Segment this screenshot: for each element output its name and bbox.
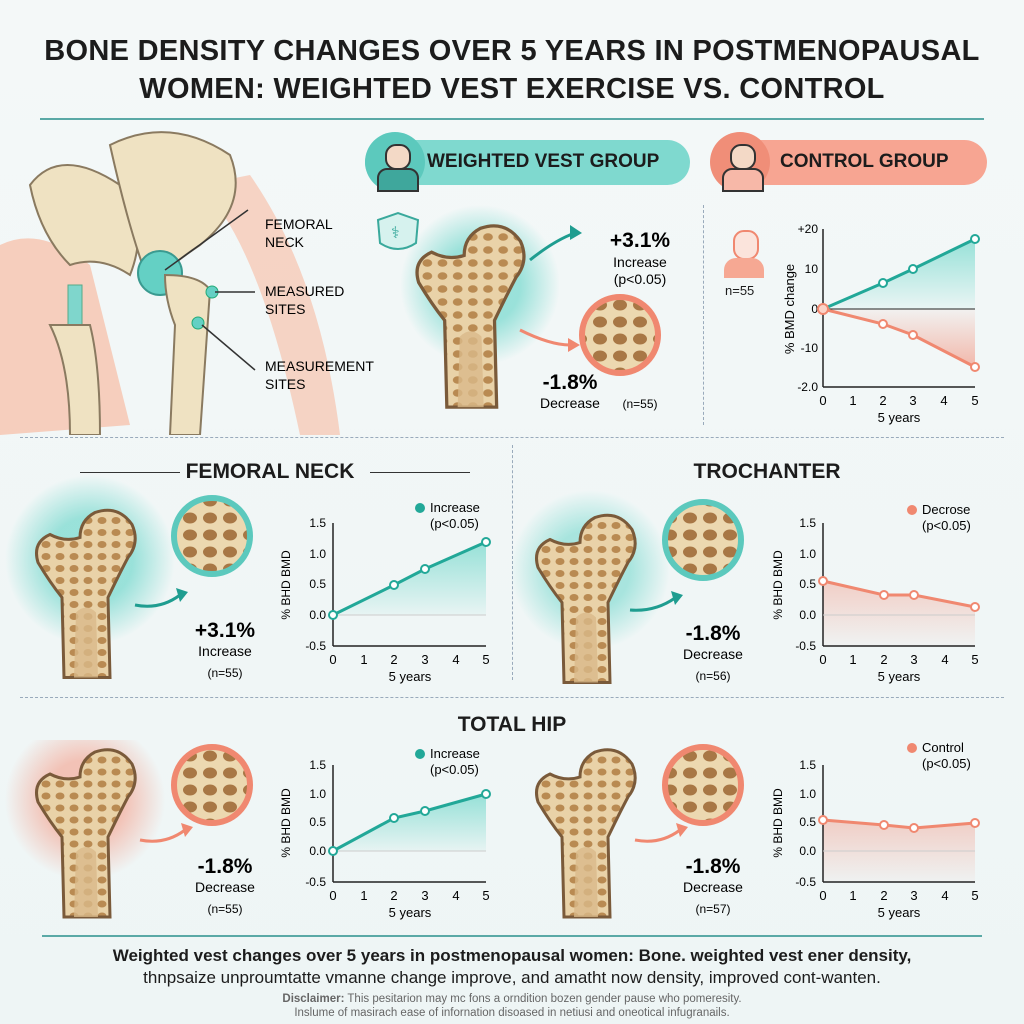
illustration: hip anatomy bbox=[0, 131, 374, 435]
weighted vest femur illustration: +3.1% bbox=[610, 229, 670, 252]
section: total hip right: 4 bbox=[941, 888, 949, 903]
chart: BMD change over 5 years bbox=[782, 222, 980, 425]
weighted vest femur illustration: Decrease bbox=[540, 395, 600, 411]
section: trochanter: TROCHANTER bbox=[694, 460, 840, 483]
summary text: Weighted vest changes over 5 years in postmenopausal women: Bone. weighted vest ener density, bbox=[113, 946, 911, 965]
summary text: thnpsaize unproumtatte vmanne change improve, and amatht now density, improved cont-wanten. bbox=[143, 968, 881, 987]
section: total hip left: Increase bbox=[430, 746, 480, 761]
section: femoral neck: Increase bbox=[430, 500, 480, 515]
chart: BMD change over 5 years: 10 bbox=[805, 262, 818, 276]
section: total hip left: Decrease bbox=[195, 879, 255, 895]
section: trochanter: % BHD BMD bbox=[771, 550, 785, 620]
section: femoral neck: % BHD BMD bbox=[279, 550, 293, 620]
section: femoral neck: -0.5 bbox=[305, 639, 326, 653]
section: total hip right: 0.0 bbox=[799, 844, 816, 858]
section: total hip right: 1 bbox=[849, 888, 857, 903]
section: femoral neck: 1 bbox=[360, 652, 368, 667]
section: femoral neck: 2 bbox=[390, 652, 398, 667]
section: trochanter: -0.5 bbox=[795, 639, 816, 653]
section: trochanter: Decrose bbox=[922, 502, 970, 517]
title: BONE DENSITY CHANGES OVER 5 YEARS IN POSTMENOPAUSAL bbox=[44, 35, 980, 67]
section: femoral neck: +3.1% bbox=[195, 619, 255, 642]
illustration: hip anatomy: FEMORAL bbox=[265, 216, 333, 232]
banner: weighted vest group: WEIGHTED VEST GROUP bbox=[427, 151, 659, 172]
illustration: hip anatomy: MEASURED bbox=[265, 283, 344, 299]
section: femoral neck: 4 bbox=[452, 652, 460, 667]
chart: BMD change over 5 years: 1 bbox=[849, 393, 857, 408]
chart: BMD change over 5 years: -10 bbox=[801, 341, 818, 355]
section: total hip right: 2 bbox=[880, 888, 888, 903]
section: total hip left: 5 years bbox=[389, 905, 432, 920]
weighted vest femur illustration bbox=[376, 209, 670, 411]
section: femoral neck: 0 bbox=[329, 652, 337, 667]
section: femoral neck: 5 years bbox=[389, 669, 432, 684]
banner: weighted vest group bbox=[365, 140, 690, 185]
section: trochanter: -1.8% bbox=[686, 622, 741, 645]
section: total hip right: -1.8% bbox=[686, 855, 741, 878]
section: total hip left: 4 bbox=[452, 888, 460, 903]
chart: BMD change over 5 years: 3 bbox=[909, 393, 917, 408]
section: femoral neck: 5 bbox=[482, 652, 490, 667]
section: femoral neck: (n=55) bbox=[207, 666, 243, 680]
section: total hip right: 3 bbox=[910, 888, 918, 903]
weighted vest femur illustration: -1.8% bbox=[543, 371, 598, 394]
section: total hip left: 2 bbox=[390, 888, 398, 903]
section: trochanter: (p<0.05) bbox=[922, 518, 971, 533]
section: total hip right: 0 bbox=[819, 888, 827, 903]
section: trochanter: 0.0 bbox=[799, 608, 816, 622]
section: trochanter: 0 bbox=[819, 652, 827, 667]
section: trochanter: 5 years bbox=[878, 669, 921, 684]
section: total hip left: (n=55) bbox=[207, 902, 243, 916]
section: total hip right: (n=57) bbox=[695, 902, 731, 916]
heading: total hip: TOTAL HIP bbox=[458, 713, 566, 736]
section: trochanter bbox=[514, 460, 980, 684]
section: total hip left: % BHD BMD bbox=[279, 788, 293, 858]
section: total hip right: 0.5 bbox=[799, 815, 816, 829]
banner: control group bbox=[712, 140, 987, 185]
section: trochanter: 4 bbox=[941, 652, 949, 667]
section: femoral neck: 3 bbox=[421, 652, 429, 667]
section: total hip right: Control bbox=[922, 740, 964, 755]
section: femoral neck: 0.0 bbox=[309, 608, 326, 622]
section: total hip left: -1.8% bbox=[198, 855, 253, 878]
disclaimer: Disclaimer: This pesitarion may mc fons a orndition bozen gender pause who pomeresity. bbox=[282, 993, 742, 1005]
section: femoral neck: Increase bbox=[198, 643, 252, 659]
section: total hip left: 3 bbox=[421, 888, 429, 903]
illustration: hip anatomy: SITES bbox=[265, 376, 305, 392]
chart: BMD change over 5 years: 0 bbox=[819, 393, 827, 408]
weighted vest femur illustration: (p<0.05) bbox=[614, 271, 666, 287]
section: trochanter: 1 bbox=[849, 652, 857, 667]
section: total hip right: 5 bbox=[971, 888, 979, 903]
section: femoral neck: (p<0.05) bbox=[430, 516, 479, 531]
section: total hip right: (p<0.05) bbox=[922, 756, 971, 771]
title: WOMEN: WEIGHTED VEST EXERCISE VS. CONTROL bbox=[139, 73, 885, 105]
disclaimer bbox=[282, 993, 742, 1019]
title bbox=[44, 35, 980, 105]
section: trochanter: 1.0 bbox=[799, 547, 816, 561]
section: femoral neck: 0.5 bbox=[309, 577, 326, 591]
section: total hip right: % BHD BMD bbox=[771, 788, 785, 858]
illustration: hip anatomy: NECK bbox=[265, 234, 305, 250]
section: femoral neck: 1.5 bbox=[309, 516, 326, 530]
chart: BMD change over 5 years: -2.0 bbox=[797, 380, 818, 394]
banner: control group: CONTROL GROUP bbox=[780, 151, 949, 172]
section: total hip left bbox=[10, 740, 491, 920]
control person icon: n=55 bbox=[725, 283, 754, 298]
weighted vest femur illustration: ⚕ bbox=[391, 225, 400, 242]
section: total hip right: Decrease bbox=[683, 879, 743, 895]
chart: BMD change over 5 years: 5 bbox=[971, 393, 979, 408]
section: trochanter: 0.5 bbox=[799, 577, 816, 591]
section: total hip left: 0.0 bbox=[309, 844, 326, 858]
section: trochanter: 1.5 bbox=[799, 516, 816, 530]
section: trochanter: (n=56) bbox=[695, 669, 731, 683]
chart: BMD change over 5 years: 4 bbox=[940, 393, 948, 408]
disclaimer: Inslume of masirach ease of infornation disoased in netiusi and oneotical infugranails. bbox=[294, 1007, 730, 1019]
section: trochanter: 3 bbox=[910, 652, 918, 667]
chart: BMD change over 5 years: +20 bbox=[798, 222, 818, 236]
section: trochanter: Decrease bbox=[683, 646, 743, 662]
section: femoral neck bbox=[9, 460, 491, 684]
section: total hip left: (p<0.05) bbox=[430, 762, 479, 777]
chart: BMD change over 5 years: 0 bbox=[811, 302, 818, 316]
illustration: hip anatomy: MEASUREMENT bbox=[265, 358, 374, 374]
section: total hip left: 1 bbox=[360, 888, 368, 903]
chart: BMD change over 5 years: 2 bbox=[879, 393, 887, 408]
section: total hip right: 1.0 bbox=[799, 787, 816, 801]
section: total hip left: 0.5 bbox=[309, 815, 326, 829]
section: femoral neck: 1.0 bbox=[309, 547, 326, 561]
section: total hip left: 0 bbox=[329, 888, 337, 903]
weighted vest femur illustration: Increase bbox=[613, 254, 667, 270]
section: total hip right: 1.5 bbox=[799, 758, 816, 772]
weighted vest femur illustration: (n=55) bbox=[622, 397, 658, 411]
section: total hip right bbox=[534, 740, 980, 920]
section: total hip right: 5 years bbox=[878, 905, 921, 920]
chart: BMD change over 5 years: % BMD change bbox=[782, 264, 797, 354]
section: total hip left: 1.0 bbox=[309, 787, 326, 801]
section: trochanter: 5 bbox=[971, 652, 979, 667]
section: total hip right: -0.5 bbox=[795, 875, 816, 889]
section: total hip left: 1.5 bbox=[309, 758, 326, 772]
section: total hip left: 5 bbox=[482, 888, 490, 903]
summary text bbox=[112, 946, 911, 987]
section: total hip left: -0.5 bbox=[305, 875, 326, 889]
control person icon bbox=[724, 230, 764, 298]
chart: BMD change over 5 years: 5 years bbox=[878, 410, 921, 425]
section: femoral neck: FEMORAL NECK bbox=[186, 460, 354, 483]
illustration: hip anatomy: SITES bbox=[265, 301, 305, 317]
section: trochanter: 2 bbox=[880, 652, 888, 667]
